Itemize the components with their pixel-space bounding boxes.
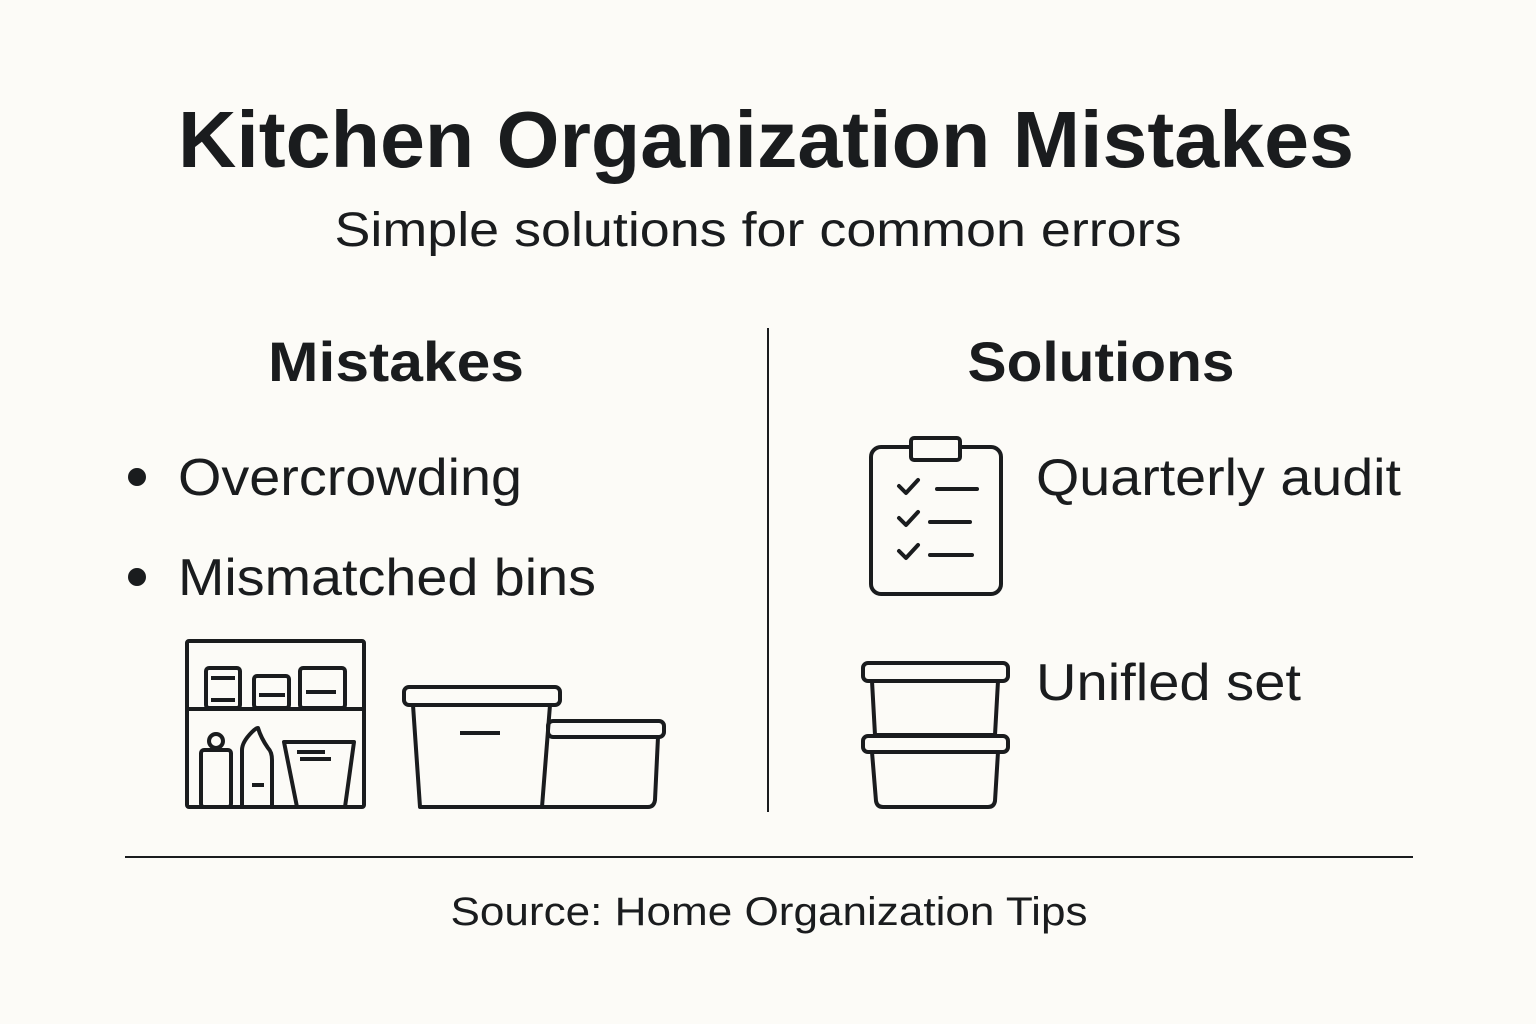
title: Kitchen Organization Mistakes <box>178 95 1354 184</box>
icon: mismatched bins <box>404 687 664 807</box>
subtitle: Simple solutions for common errors <box>334 204 1182 257</box>
icon: crowded shelf <box>187 641 364 807</box>
mistake list: Overcrowding <box>178 449 522 507</box>
solution text: unified set: Unifled set <box>1036 654 1302 712</box>
icon: unified containers <box>863 663 1008 807</box>
icon: clipboard checklist <box>871 438 1001 594</box>
mistake list: Mismatched bins <box>178 549 596 607</box>
source: Source: Home Organization Tips <box>450 890 1088 934</box>
heading: solutions: Solutions <box>968 330 1234 393</box>
solution text: quarterly audit: Quarterly audit <box>1036 449 1402 507</box>
mistake list <box>128 449 596 607</box>
heading: mistakes: Mistakes <box>268 330 524 393</box>
